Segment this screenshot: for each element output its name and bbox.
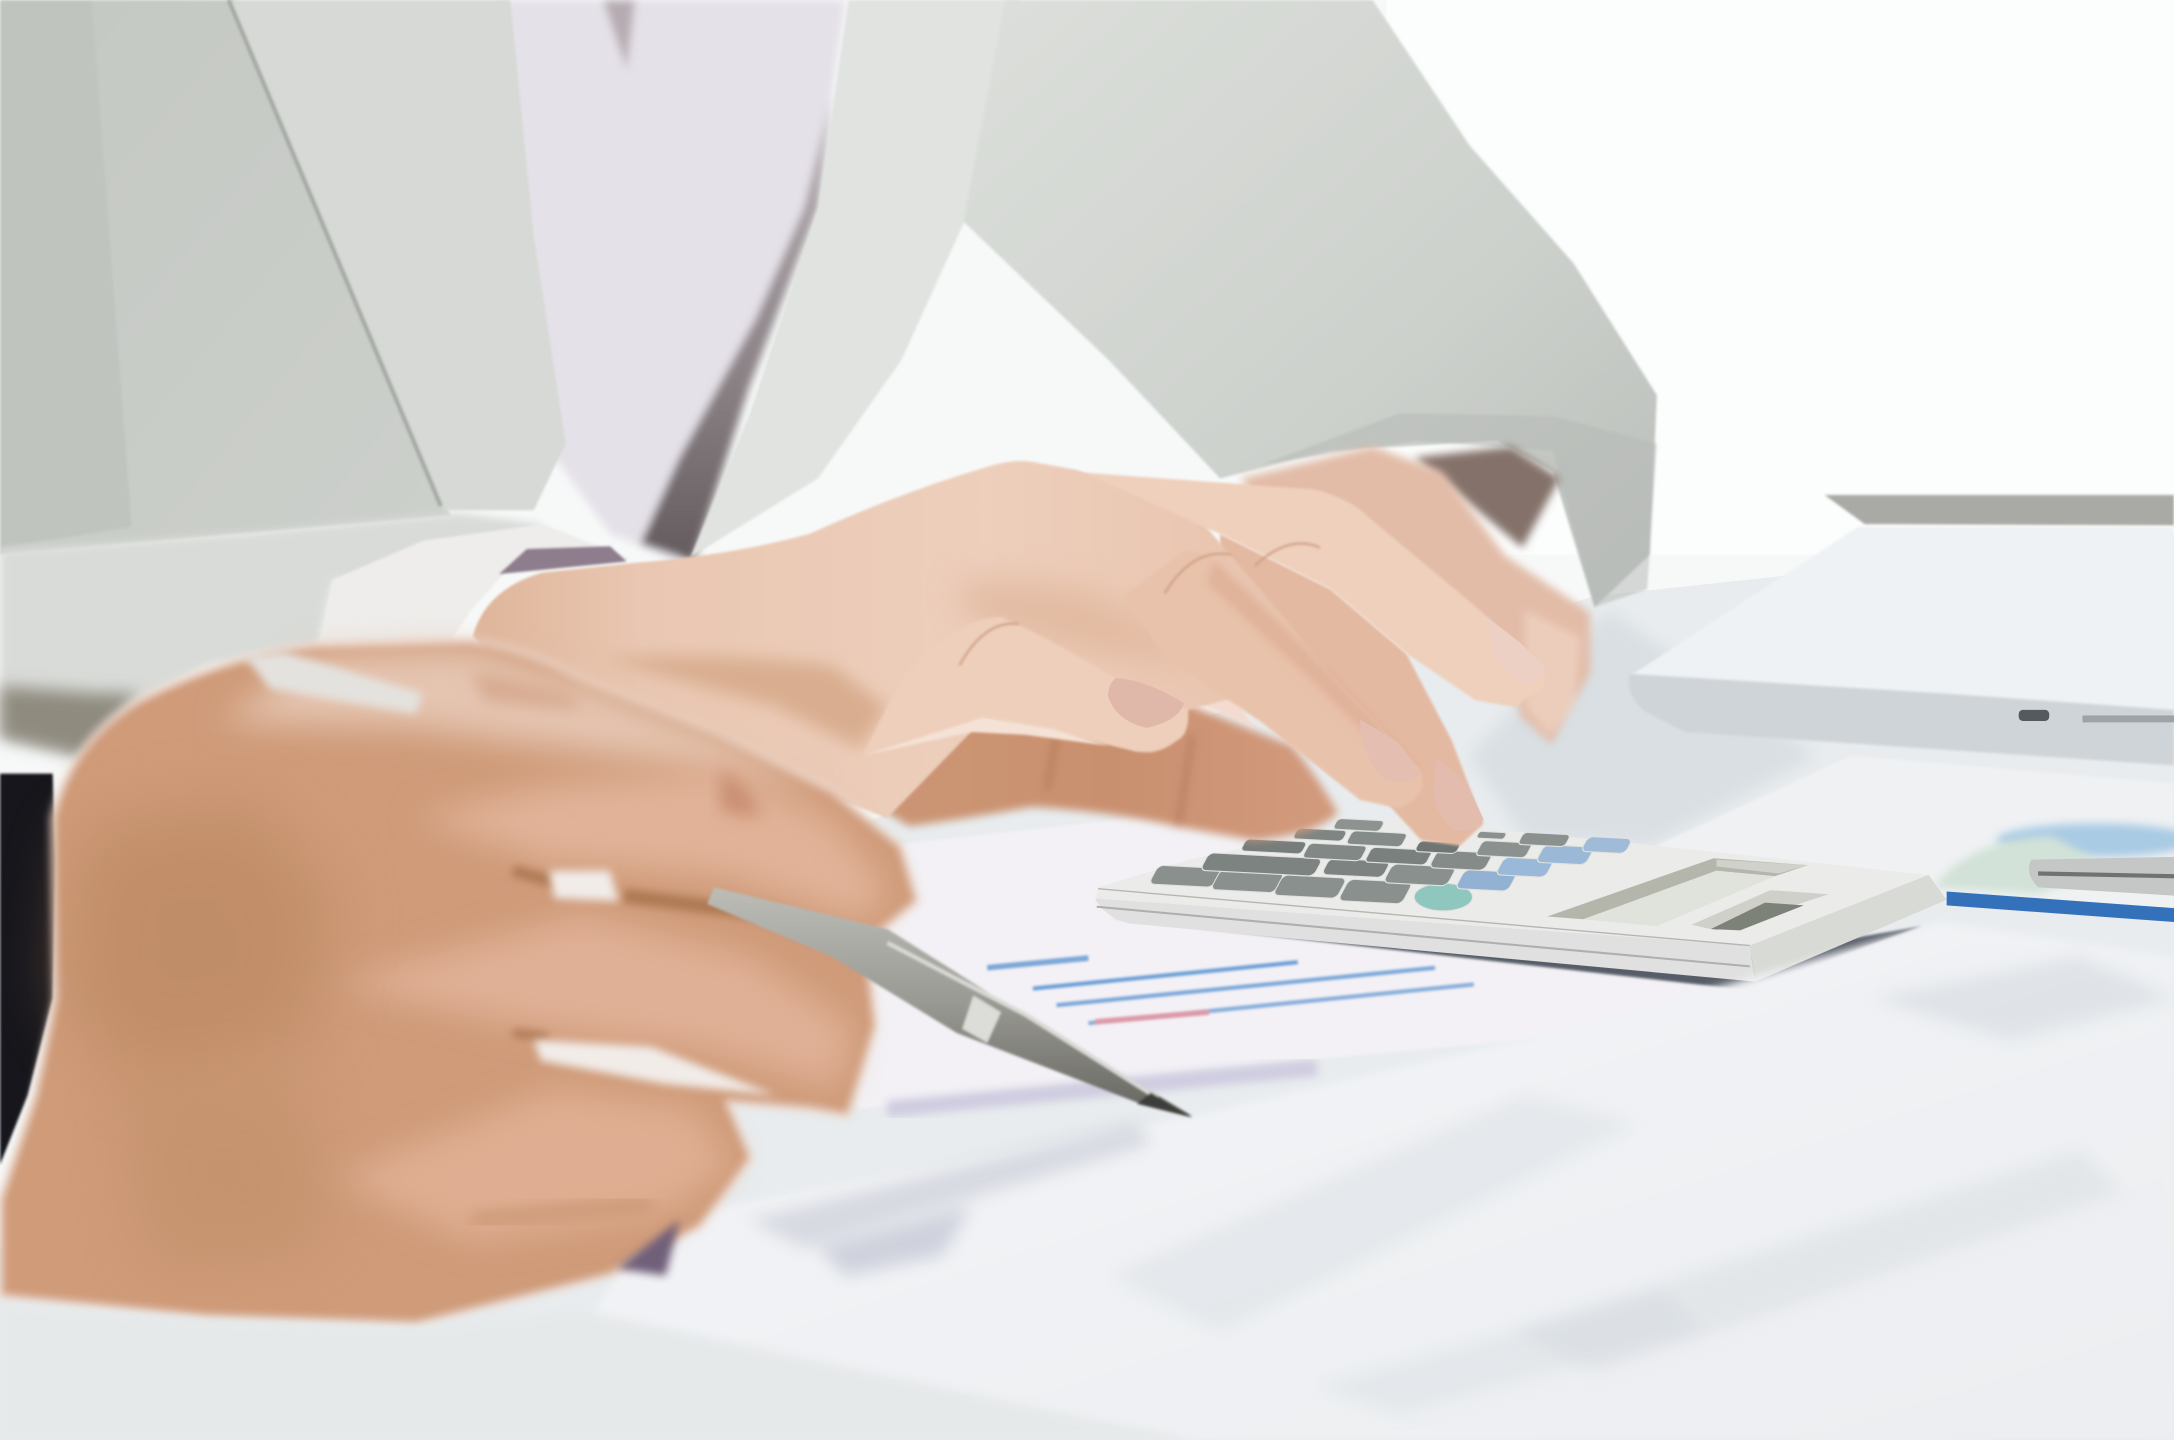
right-hand document xyxy=(1650,756,2174,922)
hand base xyxy=(0,641,918,1324)
dark cuff lining xyxy=(1414,446,1560,548)
thumb underside xyxy=(862,717,1109,756)
pale gap near thumb xyxy=(1172,666,1255,728)
finger shadows xyxy=(513,871,776,1037)
shirt xyxy=(499,0,846,562)
window glow xyxy=(1386,0,2174,555)
shirt cuff xyxy=(322,524,631,642)
blurred text rows xyxy=(1109,957,2174,1414)
thumb xyxy=(862,617,1188,756)
ring finger xyxy=(333,1088,732,1241)
fingers toward keys xyxy=(1220,534,1484,846)
pen upper end xyxy=(244,652,423,714)
ring shadow xyxy=(617,1220,679,1276)
bar chart lines xyxy=(987,958,1474,1023)
light gaps between fingers xyxy=(534,871,776,1095)
document under calculator xyxy=(832,811,1913,1109)
desk surface xyxy=(0,534,2174,1440)
top finger pale band xyxy=(222,649,818,793)
index finger xyxy=(416,769,887,922)
blazer: right sleeve xyxy=(964,0,1657,607)
desk reflection xyxy=(1470,610,1816,846)
blazer: left lapel xyxy=(229,0,566,510)
calculator small display xyxy=(1692,890,1829,930)
under palm xyxy=(776,693,1338,840)
calculator right wedge xyxy=(1750,875,1947,982)
palm crease lines xyxy=(1047,735,1192,825)
middle finger xyxy=(1068,471,1545,707)
laptop lid edge xyxy=(1825,495,2174,525)
foreground desk xyxy=(0,1303,1192,1440)
purple cuff lining xyxy=(499,546,627,574)
black sleeve xyxy=(0,774,55,1165)
front paper with blurred text xyxy=(582,922,2174,1440)
laptop ports xyxy=(2019,710,2049,721)
calculator front face xyxy=(1095,898,1755,982)
left sleeve with cuff xyxy=(0,513,631,757)
sleeve body xyxy=(0,513,544,757)
nail on pressing finger xyxy=(1434,757,1484,831)
laptop body xyxy=(1629,527,2174,732)
calculator display xyxy=(1547,858,1808,919)
green chart segment xyxy=(1934,836,2107,894)
pen barrel xyxy=(707,887,1192,1118)
blazer: right lapel xyxy=(690,0,1019,557)
blue folder line xyxy=(1947,892,2174,922)
blazer: left panel xyxy=(0,0,451,555)
hand shape xyxy=(0,641,918,1324)
blurred chart smudges xyxy=(749,1123,1151,1276)
calculator keys xyxy=(1149,818,1633,911)
blue chart circle xyxy=(1997,824,2174,857)
far hand xyxy=(1241,446,1590,745)
nail on index finger xyxy=(1360,720,1421,782)
silver pen on right xyxy=(2029,857,2174,896)
ring finger crease xyxy=(471,1203,652,1220)
index finger xyxy=(1123,550,1422,808)
calculator shadow xyxy=(1111,918,1922,990)
calculator xyxy=(1095,818,1947,990)
laptop xyxy=(1629,495,2174,765)
nail on middle finger xyxy=(1486,617,1545,684)
brown back-of-hand patches xyxy=(62,804,333,1081)
hand back xyxy=(473,461,1330,818)
back hand pressing calculator xyxy=(473,461,1545,846)
wrist and side shading xyxy=(603,656,887,749)
blurred purple chart band xyxy=(887,1068,1317,1109)
middle finger xyxy=(333,915,853,1088)
nail on thumb xyxy=(1108,678,1184,728)
front hand with pen xyxy=(0,641,1192,1324)
calculator top face xyxy=(1095,818,1947,948)
knuckle shading xyxy=(959,543,1320,666)
